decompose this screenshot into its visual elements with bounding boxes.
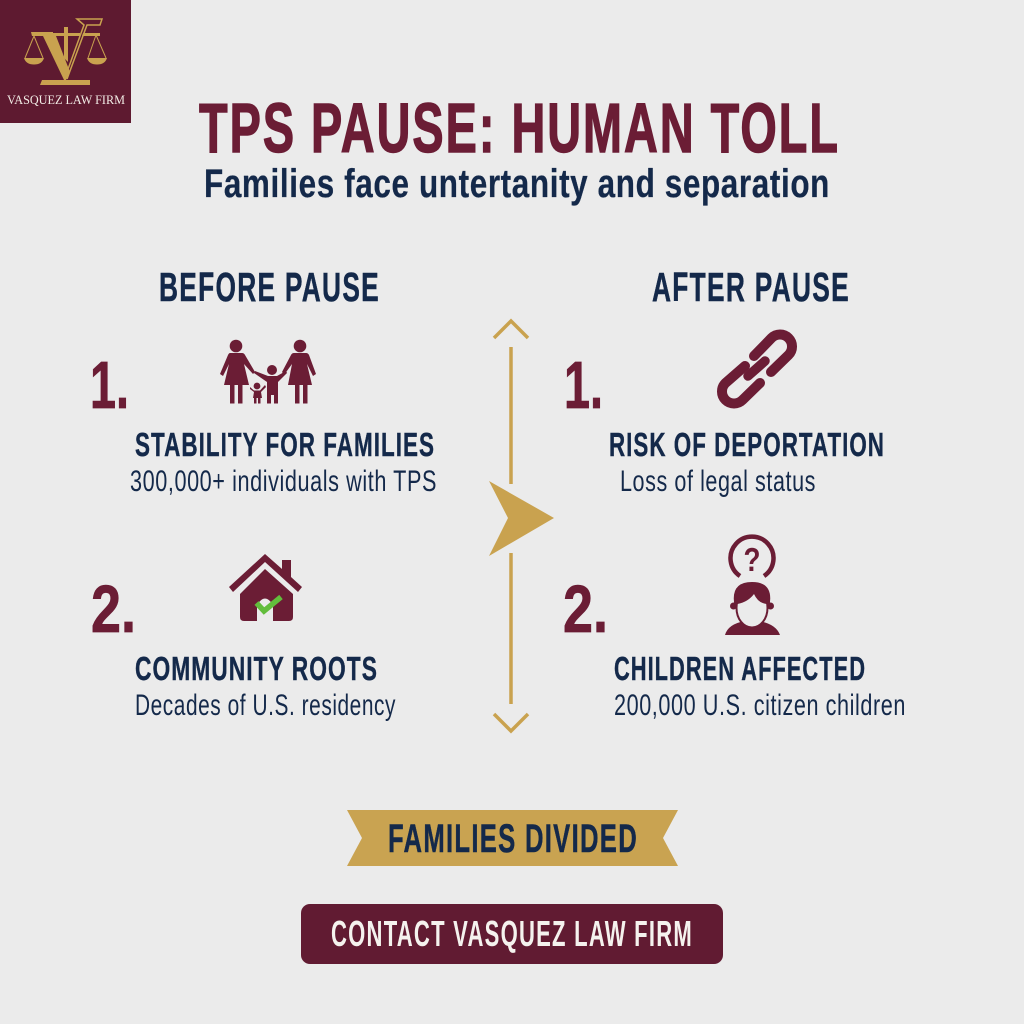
item heading: deportation: RISK OF DEPORTATION bbox=[609, 426, 885, 463]
item heading: children: CHILDREN AFFECTED bbox=[614, 650, 866, 687]
icon: child with question: ? bbox=[744, 541, 760, 578]
icon: child with question bbox=[725, 537, 780, 635]
banner: families divided: FAMILIES DIVIDED bbox=[388, 817, 638, 861]
button: contact bbox=[301, 904, 723, 964]
divider arrow bbox=[489, 321, 554, 731]
logo wordmark: VASQUEZ LAW FIRM bbox=[7, 92, 125, 107]
item number 1: 1. bbox=[90, 348, 129, 423]
panel: before pause bbox=[90, 264, 437, 722]
subtitle: Families face untertanity and separation bbox=[204, 162, 830, 206]
logo: Vasquez Law Firm bbox=[0, 0, 131, 123]
item text: deportation: Loss of legal status bbox=[620, 465, 816, 498]
item heading: stability: STABILITY FOR FAMILIES bbox=[135, 426, 435, 463]
heading: before pause: BEFORE PAUSE bbox=[159, 264, 380, 310]
heading: after pause: AFTER PAUSE bbox=[652, 264, 850, 310]
button: contact: CONTACT VASQUEZ LAW FIRM bbox=[331, 913, 693, 954]
item number 2: 2. bbox=[563, 572, 608, 647]
icon: house with check bbox=[229, 554, 302, 621]
item text: community: Decades of U.S. residency bbox=[135, 689, 396, 722]
item text: stability: 300,000+ individuals with TPS bbox=[130, 465, 437, 498]
item number 1: 1. bbox=[564, 348, 603, 423]
item number 2: 2. bbox=[91, 572, 136, 647]
icon: family bbox=[220, 340, 316, 404]
item text: children: 200,000 U.S. citizen children bbox=[614, 689, 906, 722]
panel: after pause bbox=[563, 264, 906, 722]
logo icon: scales and V bbox=[24, 19, 107, 85]
item heading: community: COMMUNITY ROOTS bbox=[135, 650, 378, 687]
banner: families divided bbox=[347, 810, 678, 866]
icon: chain link bbox=[722, 334, 792, 404]
